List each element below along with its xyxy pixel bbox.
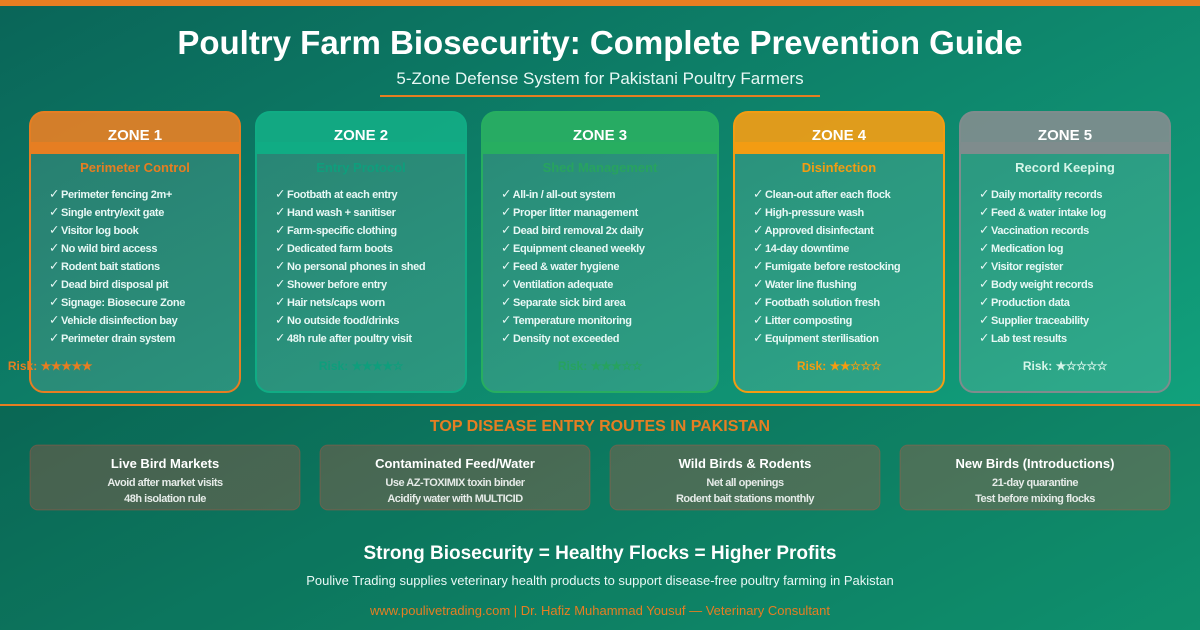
panel: zone 2 [255,111,467,393]
panel: zone 3: ✓ Density not exceeded [501,330,619,345]
panel: zone 4: ✓ Water line flushing [753,276,856,291]
panel: zone 1: ZONE 1 [108,127,162,144]
panel: zone 4: ✓ Litter composting [753,312,852,327]
panel: route contaminated feed and water: Contaminated Feed/Water [375,456,535,471]
panel: zone 2: ✓ Dedicated farm boots [275,240,392,255]
panel: route live bird markets: Live Bird Markets [111,456,219,471]
panel: zone 1: ✓ Perimeter drain system [49,330,175,345]
panel: route live bird markets: Avoid after market visits [107,477,223,489]
panel: zone 4: ✓ Clean-out after each flock [753,186,890,201]
subtitle: 5-Zone Defense System for Pakistani Poultry Farmers [396,69,804,88]
panel: zone 1: ✓ No wild bird access [49,240,157,255]
panel: zone 5: ✓ Body weight records [979,276,1093,291]
panel: zone 1: ✓ Signage: Biosecure Zone [49,294,185,309]
panel: zone 2: ✓ Hair nets/caps worn [275,294,385,309]
panel: zone 5: ✓ Medication log [979,240,1063,255]
panel: zone 2: ✓ Footbath at each entry [275,186,397,201]
panel: zone 5: Record Keeping [1015,160,1115,175]
panel: zone 4 [733,111,945,393]
panel: zone 4: Risk: ★★☆☆☆ [797,359,881,373]
panel: route wild birds and rodents: Wild Birds & Rodents [679,456,811,471]
panel: zone 4: ✓ 14-day downtime [753,240,849,255]
panel: zone 1: Perimeter Control [80,160,190,175]
supplier note: Poulive Trading supplies veterinary health products to support disease-free poultry farming in Pakistan [306,573,894,588]
panel: zone 2: ✓ Hand wash + sanitiser [275,204,396,219]
panel: zone 5: ✓ Daily mortality records [979,186,1102,201]
panel: route wild birds and rodents: Net all openings [706,477,784,489]
panel: zone 5 [959,111,1171,393]
panel: route live bird markets [30,444,300,510]
panel: zone 2: Risk: ★★★★☆ [319,359,403,373]
panel: zone 3: ✓ Feed & water hygiene [501,258,619,273]
panel: zone 2: ✓ No outside food/drinks [275,312,399,327]
panel: zone 4: ✓ Footbath solution fresh [753,294,880,309]
panel: zone 4: ✓ Equipment sterilisation [753,330,879,345]
panel: route wild birds and rodents: Rodent bait stations monthly [676,493,814,505]
panel: zone 3: ✓ All-in / all-out system [501,186,615,201]
panel: zone 4: ZONE 4 [812,127,866,144]
panel: zone 5: ✓ Supplier traceability [979,312,1089,327]
panel: zone 2: Entry Protocol [316,160,406,175]
panel: route new birds [900,444,1170,510]
panel: route new birds: 21-day quarantine [992,477,1078,489]
panel: zone 1: ✓ Rodent bait stations [49,258,160,273]
panel: zone 2: ✓ Shower before entry [275,276,387,291]
panel: zone 3: ✓ Equipment cleaned weekly [501,240,645,255]
panel: route contaminated feed and water: Use AZ-TOXIMIX toxin binder [385,477,525,489]
panel: zone 4: ✓ Approved disinfectant [753,222,873,237]
slogan: Strong Biosecurity = Healthy Flocks = Higher Profits [363,543,836,564]
panel: zone 3 [481,111,719,393]
lower section shade [0,405,1200,630]
panel: zone 1: Risk: ★★★★★ [8,359,92,373]
panel: zone 1: ✓ Visitor log book [49,222,138,237]
panel: zone 1: ✓ Vehicle disinfection bay [49,312,177,327]
title: Poultry Farm Biosecurity: Complete Prevention Guide [177,24,1023,61]
panel: zone 3: ZONE 3 [573,127,627,144]
panel: zone 3: ✓ Temperature monitoring [501,312,632,327]
panel: zone 5: ✓ Lab test results [979,330,1067,345]
panel: zone 2: ✓ Farm-specific clothing [275,222,397,237]
panel: zone 5: Risk: ★☆☆☆☆ [1023,359,1107,373]
panel: route contaminated feed and water: Acidify water with MULTICID [387,493,523,505]
panel: zone 3: ✓ Proper litter management [501,204,638,219]
panel: route contaminated feed and water [320,444,590,510]
panel: zone 2: ✓ No personal phones in shed [275,258,425,273]
panel: zone 4: Disinfection [802,160,876,175]
panel: zone 1: ✓ Single entry/exit gate [49,204,164,219]
panel: zone 5: ✓ Vaccination records [979,222,1089,237]
panel: zone 3: ✓ Dead bird removal 2x daily [501,222,643,237]
panel: zone 5: ZONE 5 [1038,127,1092,144]
panel: zone 2: ✓ 48h rule after poultry visit [275,330,412,345]
footer contact: www.poulivetrading.com | Dr. Hafiz Muhammad Yousuf — Veterinary Consultant [370,603,830,618]
panel: zone 3: Risk: ★★★☆☆ [558,359,642,373]
panel: zone 5: ✓ Production data [979,294,1070,309]
panel: zone 4: ✓ High-pressure wash [753,204,864,219]
panel: zone 3: ✓ Separate sick bird area [501,294,625,309]
panel: route wild birds and rodents [610,444,880,510]
panel: zone 3: ✓ Ventilation adequate [501,276,613,291]
panel: route new birds: New Birds (Introductions) [956,456,1114,471]
panel: zone 1 [8,111,241,393]
panel: zone 2: ZONE 2 [334,127,388,144]
panel: route new birds: Test before mixing flocks [975,493,1095,505]
panel: zone 1: ✓ Perimeter fencing 2m+ [49,186,172,201]
panel: zone 5: ✓ Feed & water intake log [979,204,1106,219]
panel: zone 4: ✓ Fumigate before restocking [753,258,900,273]
panel: zone 5: ✓ Visitor register [979,258,1063,273]
panel: zone 1: ✓ Dead bird disposal pit [49,276,168,291]
panel: route live bird markets: 48h isolation rule [124,493,206,505]
panel: zone 3: Shed Management [543,160,657,175]
heading: disease entry routes: TOP DISEASE ENTRY ROUTES IN PAKISTAN [430,418,770,435]
